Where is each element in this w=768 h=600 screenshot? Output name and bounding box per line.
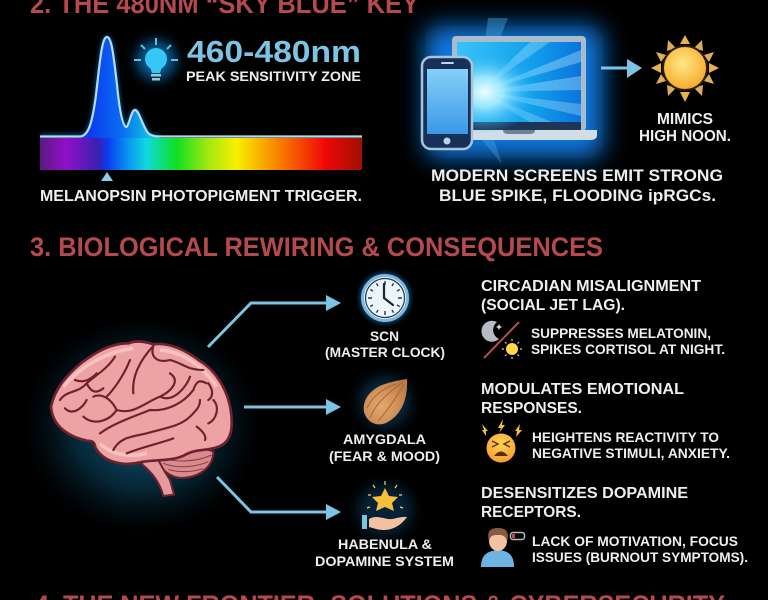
block: emotional responses: HEIGHTENS REACTIVITY TO	[532, 429, 719, 445]
label: habenula and dopamine	[315, 536, 454, 569]
callout: peak sensitivity	[186, 34, 361, 84]
spectrum chart	[40, 37, 362, 181]
callout: peak sensitivity: PEAK SENSITIVITY ZONE	[186, 68, 361, 84]
block: dopamine receptors: RECEPTORS.	[481, 504, 581, 521]
curve glow	[40, 37, 160, 136]
block: dopamine receptors: DESENSITIZES DOPAMINE	[481, 485, 688, 502]
label: habenula and dopamine: DOPAMINE SYSTEM	[315, 553, 454, 569]
block: circadian misalignment: CIRCADIAN MISALIGNMENT	[481, 278, 701, 295]
light burst	[433, 50, 537, 134]
icon: star in open hand	[357, 481, 413, 536]
block: dopamine receptors	[481, 485, 748, 567]
highlights	[63, 348, 217, 455]
caption: modern screens	[431, 166, 723, 205]
phone	[422, 57, 472, 149]
icon: brain	[51, 342, 232, 496]
caption: mimics high noon: HIGH NOON.	[639, 128, 731, 145]
spectrum bar	[40, 138, 362, 170]
block: dopamine receptors: LACK OF MOTIVATION, FOCUS	[532, 533, 738, 549]
caption: mimics high noon: MIMICS	[657, 111, 713, 128]
caption: modern screens: MODERN SCREENS EMIT STRONG	[431, 166, 723, 185]
label: amygdala: (FEAR & MOOD)	[329, 448, 440, 464]
block: emotional responses: MODULATES EMOTIONAL	[481, 381, 684, 398]
laptop	[452, 36, 597, 140]
callout: peak sensitivity: 460-480nm	[187, 34, 361, 69]
caption: modern screens: BLUE SPIKE, FLOODING ipRGCs.	[439, 186, 716, 205]
label: amygdala: AMYGDALA	[343, 431, 426, 447]
label: SCN: (MASTER CLOCK)	[325, 344, 445, 360]
label: SCN	[325, 328, 445, 360]
device glow	[425, 26, 603, 158]
light beams	[478, 18, 508, 164]
area under sensitivity curve	[80, 37, 160, 138]
block: emotional responses	[481, 381, 730, 462]
icon: light bulb	[134, 38, 178, 80]
label: habenula and dopamine: HABENULA &	[338, 536, 432, 552]
block: circadian misalignment: SPIKES CORTISOL AT NIGHT.	[531, 341, 725, 357]
icon: burned out person with low battery	[481, 528, 524, 567]
sensitivity curve line	[40, 37, 362, 136]
block: emotional responses: RESPONSES.	[481, 400, 582, 417]
heading: section 3: 3. BIOLOGICAL REWIRING & CONSEQUENCES	[30, 232, 603, 262]
caption: melanopsin trigger: MELANOPSIN PHOTOPIGMENT TRIGGER.	[40, 188, 362, 205]
arrow: screens to sun	[601, 59, 642, 78]
gyri folds	[60, 346, 217, 453]
brain stem	[141, 457, 174, 496]
icon: sun	[651, 35, 719, 102]
label: amygdala	[329, 431, 440, 464]
peak marker triangle	[101, 172, 113, 181]
icon: moon and sun crossed	[481, 321, 522, 359]
arrow: brain to SCN	[208, 295, 341, 347]
caption: mimics high noon	[639, 111, 731, 145]
block: circadian misalignment	[481, 278, 725, 359]
cerebrum	[51, 342, 232, 464]
block: circadian misalignment: SUPPRESSES MELATONIN,	[531, 325, 711, 341]
cerebellum	[155, 448, 213, 478]
arrow: brain to amygdala	[244, 399, 341, 415]
icon: laptop and phone emitting blue light	[422, 18, 603, 164]
brain glow	[24, 317, 260, 533]
label: SCN: SCN	[370, 328, 399, 344]
arrow: brain to habenula	[217, 477, 341, 520]
icon: clock	[359, 272, 411, 324]
block: circadian misalignment: (SOCIAL JET LAG).	[481, 297, 625, 314]
block: dopamine receptors: ISSUES (BURNOUT SYMPTOMS).	[532, 549, 748, 565]
icon: stressed face	[482, 419, 522, 462]
light burst rays	[494, 42, 581, 122]
block: emotional responses: NEGATIVE STIMULI, ANXIETY.	[532, 445, 730, 461]
icon: almond	[359, 376, 411, 428]
